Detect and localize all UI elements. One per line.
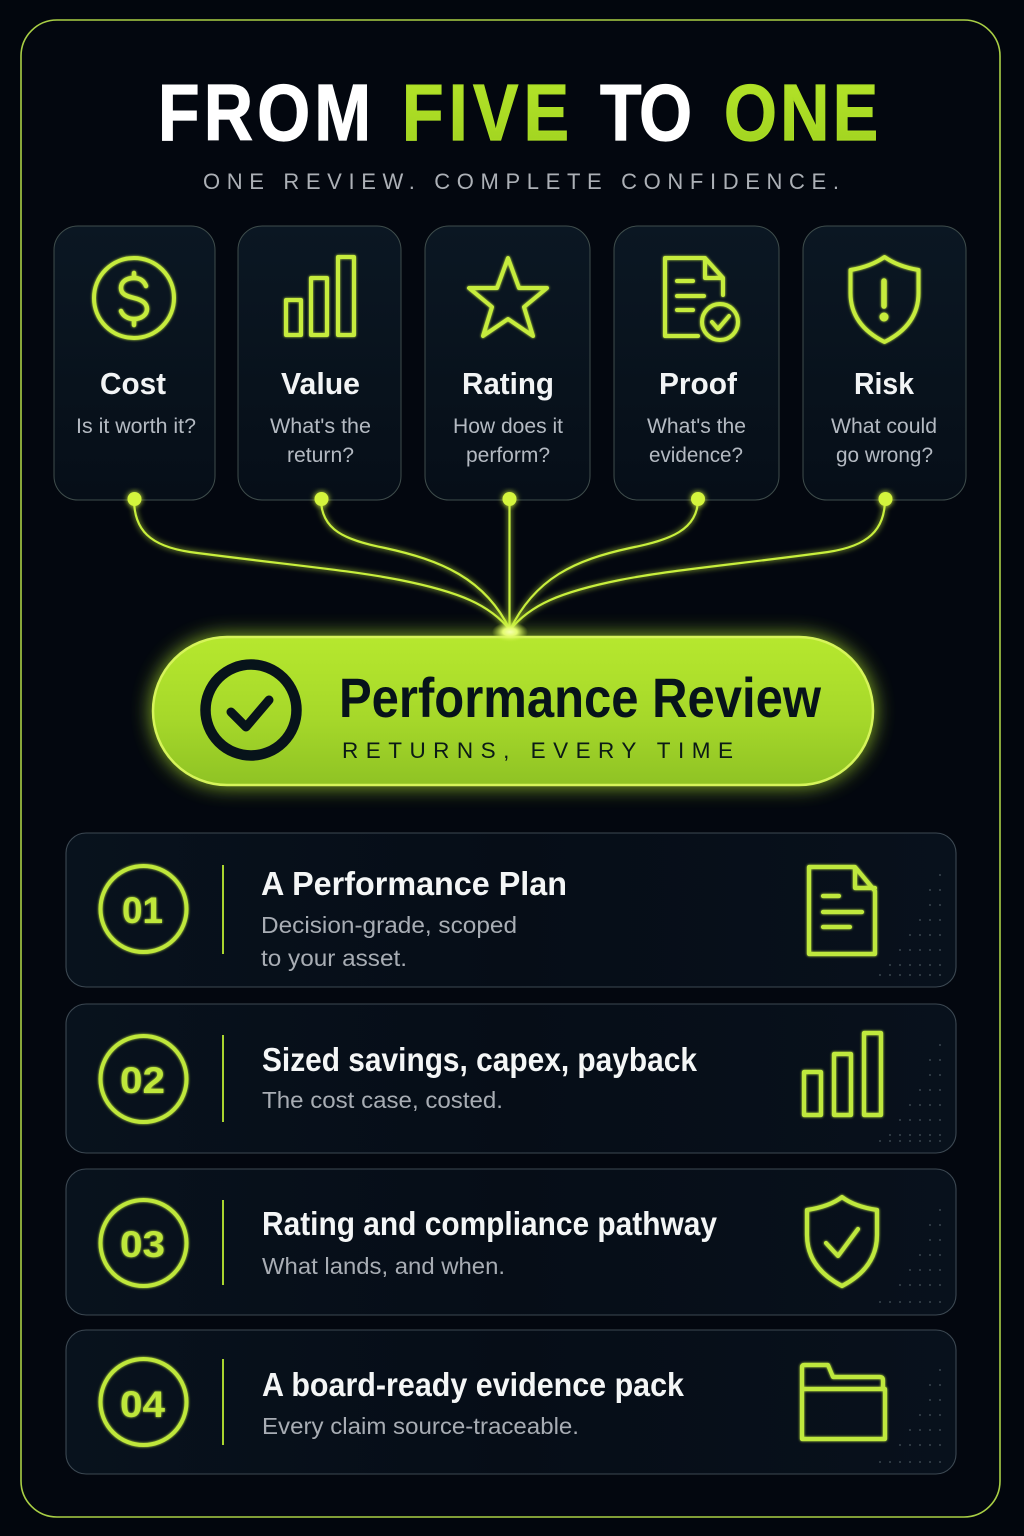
text: risk question: go wrong? [836, 444, 933, 467]
heading: cost: Cost [100, 366, 166, 401]
heading: risk: Risk [854, 366, 915, 401]
dot texture [879, 1044, 941, 1142]
panel: proof [614, 226, 779, 500]
panel: cost [54, 226, 215, 500]
connector nodes [128, 492, 892, 506]
text: proof question: What's the [647, 415, 746, 438]
dot texture [879, 874, 941, 976]
icon: folder [802, 1365, 885, 1439]
number badge 04 [100, 1359, 186, 1445]
text: rating question: perform? [466, 444, 550, 467]
icon: bar chart [286, 257, 354, 335]
text: description: Decision-grade, scoped [261, 912, 517, 938]
subtitle: ONE REVIEW. COMPLETE CONFIDENCE. [203, 169, 839, 194]
text: returns every time: RETURNS, EVERY TIME [342, 738, 733, 763]
icon: star [469, 258, 547, 336]
title [158, 68, 878, 157]
dot texture [879, 1209, 941, 1303]
number badge 02: 02 [120, 1060, 165, 1101]
heading: performance review: Performance Review [339, 666, 821, 729]
number badge 04: 04 [120, 1384, 165, 1425]
text: value question [270, 415, 371, 467]
text: risk question: What could [831, 415, 937, 438]
text: description: to your asset. [261, 945, 407, 971]
text: rating question [453, 415, 563, 467]
heading: A board-ready evidence pack [262, 1367, 684, 1404]
icon: shield warning [850, 257, 918, 342]
number badge 01 [100, 866, 186, 952]
panel: deliverable 01 [66, 833, 956, 987]
title: TO [600, 68, 692, 157]
text: description: The cost case, costed. [262, 1087, 503, 1113]
number badge 02 [100, 1036, 186, 1122]
icon: document [809, 867, 875, 954]
panel: value [238, 226, 401, 500]
icon: dollar coin [94, 258, 174, 338]
icon: bar chart [804, 1033, 881, 1115]
dot texture [879, 1369, 941, 1463]
performance review pill [152, 622, 874, 786]
panel: deliverable 03 [66, 1169, 956, 1315]
panel: risk [803, 226, 966, 500]
heading: rating: Rating [462, 366, 554, 401]
text: proof question: evidence? [649, 444, 743, 467]
text: description [261, 912, 517, 971]
icon: check circle [206, 664, 296, 756]
heading: A Performance Plan [261, 866, 567, 903]
text: value question: return? [287, 444, 354, 467]
number badge 03: 03 [120, 1224, 165, 1265]
number badge 03 [100, 1200, 186, 1286]
text: risk question [831, 415, 937, 467]
icon: shield check [807, 1197, 877, 1286]
connector lines [134, 499, 885, 630]
heading: value: Value [281, 366, 360, 401]
text: proof question [647, 415, 746, 467]
heading: Sized savings, capex, payback [262, 1042, 697, 1079]
text: description: What lands, and when. [262, 1253, 505, 1279]
heading: proof: Proof [659, 366, 738, 401]
text: description: Every claim source-traceable. [262, 1413, 579, 1439]
panel: deliverable 04 [66, 1330, 956, 1474]
panel: rating [425, 226, 590, 500]
text: cost question: Is it worth it? [76, 415, 196, 438]
title: FIVE [402, 68, 569, 157]
icon: document with check [665, 258, 738, 340]
text: value question: What's the [270, 415, 371, 438]
heading: Rating and compliance pathway [262, 1206, 717, 1243]
title: ONE [724, 68, 878, 157]
panel: deliverable 02 [66, 1004, 956, 1153]
title: FROM [158, 68, 371, 157]
text: rating question: How does it [453, 415, 563, 438]
number badge 01: 01 [122, 890, 163, 931]
